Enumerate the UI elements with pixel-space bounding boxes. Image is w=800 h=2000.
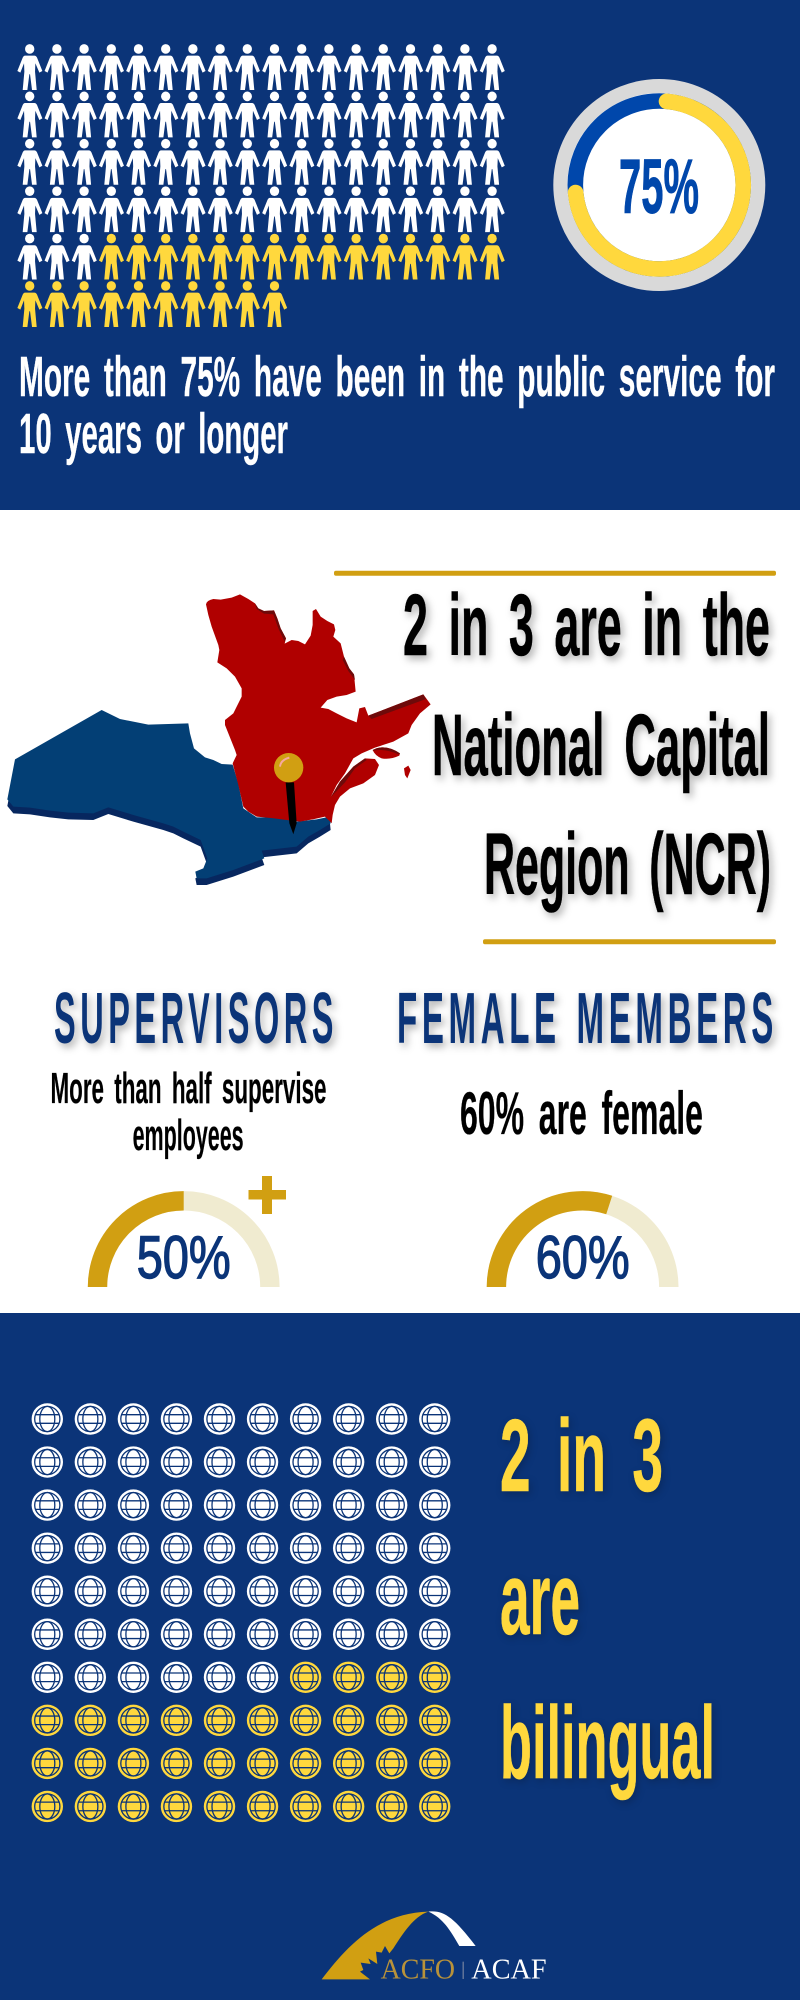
text: supervisors statement: More than half supervise	[50, 1064, 326, 1113]
panel: location and demographics	[0, 510, 800, 1313]
logo: ACFO ACAF: ACFO	[381, 1955, 455, 1986]
pictogram: 100 people, 75 white and 25 yellow	[17, 44, 505, 327]
Ontario	[7, 710, 331, 885]
map: Ontario and Quebec with pin	[7, 594, 431, 885]
divider line bottom	[483, 939, 776, 944]
heading: 2 in 3 are bilingual: are	[500, 1541, 580, 1656]
gauge: 60%: 60%	[536, 1224, 630, 1291]
heading: 2 in 3 are bilingual	[500, 1398, 715, 1800]
panel: top years of service	[0, 0, 800, 510]
icon: plus sign	[248, 1176, 286, 1214]
donut chart: 75%	[560, 86, 758, 284]
donut chart: 75%: 75%	[619, 144, 699, 230]
heading: 2 in 3 are bilingual: 2 in 3	[500, 1398, 663, 1513]
text: supervisors statement: employees	[133, 1111, 244, 1160]
pictogram: 100 globes, 66 white and 34 yellow	[32, 1403, 450, 1822]
logo: ACFO ACAF: ACAF	[471, 1955, 547, 1986]
text: supervisors statement	[50, 1064, 326, 1160]
gauge: 60%	[496, 1201, 669, 1291]
text: SUPERVISORS	[54, 979, 338, 1059]
heading: 2 in 3 in the National Capital Region	[403, 577, 771, 913]
logo: ACFO ACAF	[322, 1911, 547, 1986]
Quebec and pin	[206, 594, 431, 834]
divider line top	[334, 571, 776, 576]
panel: bilingualism	[0, 1313, 800, 2000]
gauge: 50% plus	[98, 1201, 270, 1291]
gauge: 50% plus: 50%	[137, 1224, 231, 1291]
text: years of service statement	[19, 345, 775, 466]
text: years of service statement: 10 years or longer	[19, 402, 288, 466]
